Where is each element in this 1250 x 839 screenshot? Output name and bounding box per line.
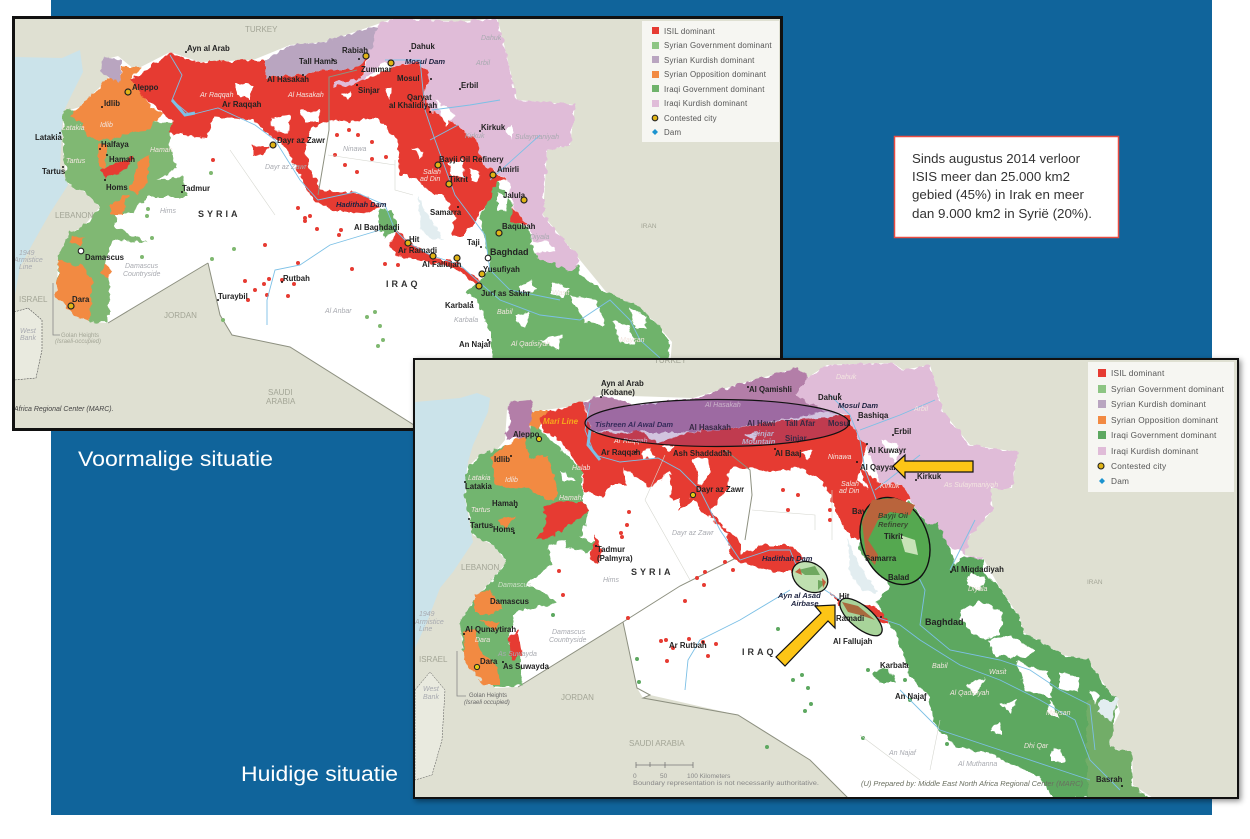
country and region labels: (Israeli-occupied) [55,339,101,345]
legend map 2 [1088,362,1234,492]
Syrian government territory [57,110,187,323]
legend map 1: Syrian Opposition dominant [664,70,767,79]
country and region labels: Ninawa [343,146,366,153]
country and region labels: LEBANON [55,211,93,220]
province borders [318,70,357,195]
country and region labels: 1949 [419,611,435,618]
country and region labels: Tartus [66,158,86,165]
info box: Sinds augustus 2014 verloor [912,151,1081,166]
ellipse: Tikrit area: Refinery [878,520,909,529]
Iraqi government territory [378,181,670,358]
country and region labels: Dayr az Zawr [672,530,714,537]
country and region labels: Karbala [454,317,478,324]
city labels: Homs [493,525,515,534]
caption: former situation: Voormalige situatie [78,448,273,471]
isolated dots [213,130,401,300]
west bank [415,672,445,780]
territories map 1 [54,19,670,358]
Syrian opposition territory [463,412,558,685]
country and region labels: ISRAEL [19,295,48,304]
isolated dots [559,490,830,661]
city labels: Ayn al Asad [777,591,821,600]
city labels: Tartus [470,521,494,530]
city labels: An Najaf [459,340,491,349]
country and region labels: Dhi Qar [1024,743,1049,750]
ellipse: Ayn al Asad [786,555,834,599]
country base [57,18,672,430]
info box: dan 9.000 km2 in Syrië (20%). [912,206,1092,221]
country and region labels: Ninawa [828,454,851,461]
arrow: Al Qayyarah [893,455,973,478]
city labels: Amirli [497,165,519,174]
ellipse: northern ISIL loss [585,400,849,446]
city labels: Tadmur [182,184,210,193]
country and region labels: Maysan [1046,710,1071,717]
city dots [464,387,1122,786]
city labels: Sinjar [753,429,775,438]
country and region labels: Hims [603,577,619,584]
country and region labels: IRAQ [742,647,776,657]
country and region labels [13,25,657,413]
scale bar: Boundary representation is not necessarily authoritative. [633,780,819,787]
ellipse: Ramadi: Ramadi [836,614,864,623]
lower right lighter band [1087,700,1148,798]
country and region labels: Al Hasakah [704,402,741,409]
country and region labels: Bank [423,694,439,701]
Iraqi Kurdish territory [333,18,580,272]
city labels: Aleppo [513,430,540,439]
legend map 1: ISIL dominant [664,27,716,36]
ellipse: Tikrit area: Balad [888,573,909,582]
city labels: Erbil [461,81,478,90]
city labels [465,379,1123,784]
country and region labels: (Israeli occupied) [464,700,510,706]
legend map 1: Syrian Kurdish dominant [664,56,755,65]
country and region labels: TURKEY [654,356,687,365]
city labels: Mosul [397,74,420,83]
country and region labels: Damascus [125,263,159,270]
city labels: Hadithah Dam [336,200,387,209]
city labels: Mari Line [543,417,579,426]
country and region labels: As Suwayda [497,651,537,658]
country and region labels: SAUDI [268,388,292,397]
city labels: Rutbah [283,274,310,283]
country and region labels: IRAN [641,223,657,230]
map: former situation [13,17,782,430]
legend map 1: Dam [664,128,681,137]
country base [460,363,1153,798]
city labels: Idlib [104,99,120,108]
sea [14,50,83,300]
scale bar: 50 [660,773,668,780]
country and region labels: IRAN [1087,579,1103,586]
city labels: Al Baaj [775,449,801,458]
info box: ISIS meer dan 25.000 km2 [912,169,1070,184]
ellipse: Tikrit area [848,487,942,595]
legend map 1: Iraqi Government dominant [664,85,765,94]
city labels: Karbala [880,661,909,670]
country and region labels: ad Din [420,176,440,183]
country and region labels: Idlib [505,477,518,484]
country and region labels: Line [19,264,32,271]
city labels: An Najaf [895,692,927,701]
city labels: Damascus [490,597,530,606]
ellipse: Tikrit area: Samarra [865,554,897,563]
country and region labels: West [423,686,440,693]
country and region labels: Armistice [13,257,43,264]
arrow: Ramadi [776,605,835,666]
legend map 1: Contested city [664,114,717,123]
country and region labels: Latakia [468,475,491,482]
city labels: Tartus [42,167,66,176]
city labels: Karbala [445,301,474,310]
city labels: Halfaya [101,140,129,149]
city labels [35,42,536,349]
city labels: Al Hasakah [689,423,731,432]
country and region labels: Countryside [549,637,586,644]
country and region labels: Babil [932,663,948,670]
info box [894,136,1118,238]
city labels: Baghdad [490,247,529,257]
country and region labels: Maysan [620,337,645,344]
city labels: Al Hasakah [267,75,309,84]
map: current situation [414,356,1238,798]
city labels: Idlib [494,455,510,464]
city labels: Al Hawl [747,419,775,428]
city labels: Basrah [1096,775,1123,784]
city labels: Jalula [503,191,526,200]
legend map 1 [642,21,779,142]
city labels: Hamah [109,155,135,164]
credit: (U) Prepared by: Middle East North Africa Regional Center (MARC) [861,779,1083,788]
legend map 2: Iraqi Government dominant [1111,430,1217,440]
country and region labels: Dahuk [836,374,857,381]
country and region labels: Hamah [559,495,582,502]
Golan pointer [457,651,466,696]
country and region labels: Al Hasakah [287,92,324,99]
Syrian government territory [460,425,600,688]
country and region labels: ISRAEL [419,655,448,664]
city labels: (Palmyra) [597,554,633,563]
country and region labels: Golan Heights [61,333,99,339]
city labels: Airbase [790,599,819,608]
scale bar [633,762,819,787]
country and region labels: LEBANON [461,563,499,572]
city labels: Dayr az Zawr [277,136,325,145]
country and region labels: JORDAN [561,693,594,702]
country and region labels: As Sulaymaniyah [943,482,998,489]
city labels: Tall Afar [785,419,815,428]
country and region labels: Salah [841,481,859,488]
ellipse: Ramadi [834,592,888,642]
country and region labels: IRAQ [386,279,420,289]
caption: current situation: Huidige situatie [241,763,398,786]
city labels: Baghdad [925,617,964,627]
Syrian Kurdish territory [100,27,378,83]
city labels: Turaybil [218,292,248,301]
country and region labels: Latakia [62,125,85,132]
city labels: Ar Rutbah [669,641,707,650]
city labels: Al Fallujah [833,637,873,646]
legend map 2: ISIL dominant [1111,368,1165,378]
country and region labels: Halab [572,465,590,472]
city labels: Homs [106,183,128,192]
country and region labels: West [20,328,37,335]
country and region labels: Ar Raqqah [199,92,234,99]
city labels: Qaryat [407,93,432,102]
west bank [14,308,42,380]
city labels: Mosul [828,419,851,428]
ISIL territory [100,53,528,290]
scattered green [872,668,896,684]
city labels: Erbil [894,427,911,436]
country and region labels: Sulaymaniyah [515,134,559,141]
legend map 2: Syrian Government dominant [1111,384,1225,394]
white gaps [235,83,648,350]
city labels: Tikrit [449,175,468,184]
country and region labels: JORDAN [164,311,197,320]
city labels: (Kobane) [601,388,635,397]
country and region labels: ad Din [839,488,859,495]
scale bar: 0 [633,773,637,780]
capital markers [78,248,491,261]
country and region labels: 1949 [19,250,35,257]
city labels: Sinjar [785,434,807,443]
city labels: Dahuk [411,42,435,51]
city labels: Tishreen Al Awal Dam [595,420,673,429]
country and region labels: Kirkuk [880,483,900,490]
country and region labels: Dara [475,637,490,644]
city labels: Yusufiyah [483,265,520,274]
legend map 1: Syrian Government dominant [664,41,772,50]
city labels: Al Baghdadi [354,223,399,232]
city labels: Al Qayyarah [860,463,906,472]
city labels: Al Kuwayr [868,446,906,455]
city labels: Latakia [465,482,493,491]
city labels: Samarra [430,208,462,217]
country and region labels: Hamah [150,147,173,154]
country and region labels: Idlib [100,122,113,129]
city labels: Al Qamishli [749,385,792,394]
city labels: Aleppo [132,83,159,92]
country and region labels: TURKEY [245,25,278,34]
city labels: Ar Raqqah [601,448,641,457]
city labels: al Khalidiyah [389,101,437,110]
country and region labels: Wasit [552,290,570,297]
city labels: Bayji [852,507,871,516]
legend map 2: Contested city [1111,461,1167,471]
city labels: Bayji Oil Refinery [439,155,504,164]
city labels: Latakia [35,133,63,142]
country and region labels: Golan Heights [469,693,507,699]
country and region labels: Diyala [968,586,988,593]
city labels: Bashiqa [858,411,889,420]
white gaps [560,432,1100,762]
city labels: Mosul Dam [838,401,878,410]
country and region labels: ARABIA [266,397,296,406]
city labels: Tadmur [597,545,625,554]
ellipse: Tikrit area: Tikrit [884,532,903,541]
country and region labels: Al Muthanna [957,761,997,768]
city labels: As Suwayda [503,662,550,671]
legend map 1: Iraqi Kurdish dominant [664,99,748,108]
city labels: Damascus [85,253,125,262]
country and region labels: SAUDI ARABIA [629,739,685,748]
city labels: Hadithah Dam [762,554,813,563]
country and region labels: Ar Raqqah [613,438,648,445]
city labels: Hit [409,235,420,244]
country and region labels: Tartus [471,507,491,514]
ellipse: Tikrit area: Bayji Oil [878,511,909,520]
city labels: Tall Hamis [299,57,338,66]
country and region labels: Armistice [414,619,444,626]
city labels: Hamah [492,499,518,508]
city labels: Al Fallujah [422,260,462,269]
city labels: Al Qunaytirah [465,625,516,634]
contested city markers [474,436,875,670]
city labels: Ayn al Arab [187,44,230,53]
country and region labels: Babil [497,309,513,316]
city labels: Al Miqdadiyah [951,565,1004,574]
city labels: Kirkuk [481,123,506,132]
city labels: Taji [467,238,480,247]
city labels: Rabiah [342,46,368,55]
country and region labels: Al Qadisiyah [949,690,989,697]
city labels: Zummar [361,65,392,74]
city labels: Dahuk [818,393,842,402]
rivers [585,395,1120,790]
Syrian opposition territory [55,67,163,320]
city labels: Dara [72,295,90,304]
city labels: Mountain [742,437,776,446]
legend map 2: Dam [1111,476,1129,486]
city labels: Jurf as Sakhr [481,289,530,298]
country and region labels: Africa Regional Center (MARC). [13,406,114,413]
territories map 2 [460,363,1148,798]
sea [415,393,490,648]
city labels: Ar Ramadi [398,246,437,255]
city labels: Mosul Dam [405,57,445,66]
country and region labels: Dayr az Zawr [265,164,307,171]
pale lake [418,195,444,240]
contested city markers [68,53,527,309]
city labels: Sinjar [358,86,380,95]
country and region labels: Bank [20,335,36,342]
Golan pointer [53,283,60,335]
country and region labels: Damascus [552,629,586,636]
city labels: Kirkuk [917,472,942,481]
city labels: Ayn al Arab [601,379,644,388]
rivers [170,55,660,358]
Iraqi Kurdish territory [795,363,1017,565]
Syrian Kurdish territory [505,368,832,440]
legend map 2: Iraqi Kurdish dominant [1111,446,1199,456]
city labels: Ar Raqqah [222,100,262,109]
country and region labels: An Najaf [888,750,917,757]
country and region labels: Salah [423,169,441,176]
borders [725,450,752,540]
country and region labels: Kirkuk [465,133,485,140]
country and region labels: Damascus [498,582,532,589]
country and region labels: Arbil [475,60,490,67]
info box: gebied (45%) in Irak en meer [912,187,1085,202]
country and region labels: Arbil [913,406,928,413]
country and region labels: SYRIA [198,209,241,219]
country and region labels: Line [419,626,432,633]
Iraqi government territory [858,500,1148,798]
ISIL territory [508,402,910,660]
country and region labels: Al Anbar [324,308,352,315]
country and region labels: Diyala [530,234,550,241]
scale bar: 100 Kilometers [687,773,731,780]
country and region labels: Al Qadisiyah [510,341,550,348]
city labels: Dara [480,657,498,666]
country and region labels: SYRIA [631,567,674,577]
city labels: Ash Shaddadah [673,449,732,458]
country and region labels: Hims [160,208,176,215]
pale lake [848,540,1118,722]
country and region labels [414,356,1103,768]
city dots [60,51,488,340]
city labels: Hit [839,592,850,601]
city labels: Dayr az Zawr [696,485,744,494]
country and region labels: Wasit [989,669,1007,676]
legend map 2: Syrian Kurdish dominant [1111,399,1206,409]
country and region labels: Dahuk [481,35,502,42]
country and region labels: Countryside [123,271,160,278]
legend map 2: Syrian Opposition dominant [1111,415,1219,425]
map frame former [13,17,782,430]
city labels: Baqubah [502,222,536,231]
